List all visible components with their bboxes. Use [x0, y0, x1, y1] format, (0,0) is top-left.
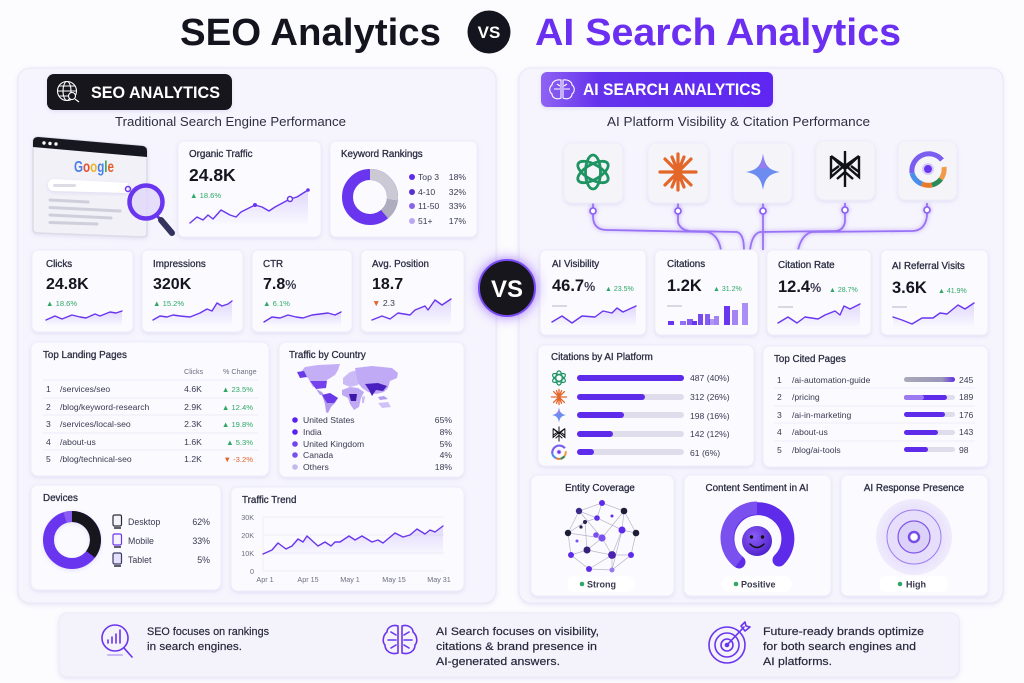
card: traffic by country [279, 342, 464, 477]
table: top cited pages: 98 [959, 445, 969, 455]
card: impressions: ▲ 15.2% [153, 299, 184, 308]
text: SEO focus [147, 626, 269, 653]
table: top cited pages: 4 [777, 427, 782, 437]
card: devices [31, 485, 221, 590]
table: top cited pages: /blog/ai-tools [792, 445, 841, 455]
line chart: traffic trend: May 1 [340, 575, 360, 584]
line chart: traffic trend [241, 513, 451, 584]
table: top landing pages: 1 [46, 384, 51, 394]
legend: devices: Tablet [128, 555, 152, 565]
donut: keyword rankings [348, 174, 393, 220]
card: content sentiment: Content Sentiment in AI [706, 483, 808, 494]
card: impressions: 320K [153, 276, 192, 293]
table: top landing pages: Clicks [184, 367, 204, 376]
status pill: high [879, 576, 948, 592]
badge: SEO analytics: SEO ANALYTICS [91, 83, 220, 102]
table: top landing pages: /about-us [60, 437, 96, 447]
table: top landing pages: 2.3K [184, 419, 202, 429]
legend: traffic by country: United Kingdom [303, 439, 364, 449]
status pill: strong [567, 576, 635, 592]
title: SEO Analytics [180, 12, 441, 54]
bar list: citations by platform [551, 371, 730, 459]
table: top cited pages: 143 [959, 427, 974, 437]
badge: SEO analytics [47, 74, 232, 110]
table: top landing pages: /services/seo [60, 384, 110, 394]
world map [297, 364, 398, 413]
line chart: traffic trend: Apr 15 [297, 575, 319, 584]
line chart: traffic trend: 20K [241, 531, 254, 540]
legend: traffic by country: Canada [303, 450, 333, 460]
connector lines [590, 203, 930, 250]
table: top landing pages: 4.6K [184, 384, 202, 394]
card: organic traffic [178, 141, 321, 237]
text: SEO focus: SEO focuses on rankings [147, 626, 269, 638]
bar list: citations by platform: 142 (12%) [690, 429, 730, 439]
legend: devices: Mobile [128, 536, 154, 546]
card: citations by AI platform: Citations by AI Platform [551, 352, 653, 363]
donut: devices [48, 516, 96, 564]
card: clicks: 24.8K [46, 276, 89, 293]
legend: keyword rankings: 18% [449, 172, 466, 182]
icon: brain [383, 625, 417, 654]
card: AI referral visits: ▲ 41.9% [938, 288, 967, 295]
text: AI search focus [436, 626, 599, 668]
line chart: traffic trend: 0 [250, 567, 254, 576]
card: AI visibility: ▲ 23.5% [605, 286, 634, 293]
card: average position: Avg. Position [372, 259, 429, 270]
icon tile: Claude [648, 143, 708, 203]
table: top cited pages: 176 [959, 410, 974, 420]
status pill: high: High [906, 580, 926, 590]
VS badge: VS [491, 276, 523, 303]
card: citation rate: Citation Rate [778, 260, 835, 271]
table: top landing pages: % Change [223, 367, 257, 376]
title [180, 10, 901, 54]
card: citations [655, 250, 758, 335]
VS badge [479, 260, 535, 316]
card: top landing pages [31, 342, 269, 476]
text: future-ready brands: AI platforms. [763, 656, 832, 668]
table: top cited pages: 3 [777, 410, 782, 420]
table: top cited pages: 5 [777, 445, 782, 455]
card: citations by AI platform [538, 345, 754, 466]
line chart: traffic trend: 30K [241, 513, 254, 522]
legend: devices: Desktop [128, 517, 160, 527]
table: top landing pages: /blog/keyword-research [60, 402, 150, 412]
text: AI search focus: AI Search focuses on visibility, [436, 626, 599, 638]
bar list: citations by platform: 61 (6%) [690, 448, 720, 458]
card: entity coverage: Entity Coverage [565, 483, 635, 494]
table: top landing pages: 5 [46, 454, 51, 464]
status pill: strong: Strong [587, 580, 616, 590]
table: top cited pages: 1 [777, 375, 782, 385]
panel: AI search analytics [519, 68, 1003, 603]
bar chart: citations [668, 303, 748, 325]
legend: devices: 33% [192, 536, 210, 546]
card: AI visibility: AI Visibility [552, 259, 599, 270]
card: average position [361, 250, 464, 332]
table: top landing pages: ▲ 23.5% [222, 385, 253, 394]
text: AI search focus: citations & brand presence in [436, 641, 597, 653]
subtitle: Traditional Search Engine Performance [115, 114, 346, 129]
legend: keyword rankings: 4-10 [418, 187, 435, 197]
card: average position: 18.7 [372, 276, 403, 293]
legend: traffic by country: 65% [435, 415, 452, 425]
card: AI referral visits: AI Referral Visits [892, 261, 965, 272]
card: average position: ▼ 2.3 [372, 298, 395, 308]
legend: keyword rankings: 33% [449, 201, 466, 211]
badge: AI search analytics: AI SEARCH ANALYTICS [583, 81, 761, 99]
card: citation rate: 12.4% [778, 278, 821, 296]
status pill: positive: Positive [741, 580, 776, 590]
legend: devices: 5% [197, 555, 210, 565]
card: AI visibility: 46.7% [552, 277, 595, 295]
legend: traffic by country: India [303, 427, 322, 437]
table: top landing pages: ▼ -3.2% [224, 455, 253, 464]
illustration: browser with magnifier: Google [74, 159, 114, 176]
legend: keyword rankings: 32% [449, 187, 466, 197]
subtitle: AI Platform Visibility & Citation Performance [607, 114, 870, 129]
table: top landing pages: 1.2K [184, 454, 202, 464]
card: top landing pages: Top Landing Pages [43, 350, 127, 361]
table: top landing pages: /services/local-seo [60, 419, 131, 429]
card: CTR: CTR [263, 259, 283, 270]
icon: target [709, 622, 750, 663]
table: top cited pages: /ai-automation-guide [792, 375, 871, 385]
card: impressions [142, 250, 243, 332]
card: AI response presence: AI Response Presence [864, 483, 965, 494]
panel: SEO analytics [18, 68, 496, 603]
text: future-ready brands: Future-ready brands optimize [763, 626, 924, 638]
title: AI Search Analytics [535, 12, 901, 54]
table: top cited pages: 245 [959, 375, 974, 385]
card: organic traffic: 24.8K [189, 165, 236, 185]
bar list: citations by platform: 198 (16%) [690, 411, 730, 421]
table: top landing pages: 2 [46, 402, 51, 412]
line chart: traffic trend: 10K [241, 549, 254, 558]
legend: keyword rankings: 17% [449, 216, 466, 226]
text: future-ready brands: for both search engines and [763, 641, 916, 653]
legend: traffic by country [292, 415, 452, 472]
card: traffic trend: Traffic Trend [242, 495, 296, 506]
card: AI visibility [540, 250, 646, 335]
card: clicks: Clicks [46, 259, 72, 270]
legend: keyword rankings: Top 3 [418, 172, 439, 182]
card: top cited pages: Top Cited Pages [774, 354, 846, 365]
card: keyword rankings [330, 141, 477, 237]
card: organic traffic: Organic Traffic [189, 149, 253, 160]
illustration: browser with magnifier [33, 137, 172, 237]
card: traffic trend [231, 487, 464, 591]
table: top cited pages: /about-us [792, 427, 828, 437]
card: keyword rankings: Keyword Rankings [341, 149, 423, 160]
legend: traffic by country: 8% [440, 427, 452, 437]
legend: traffic by country: Others [303, 462, 329, 472]
icon tile: ChatGPT [564, 143, 623, 203]
table: top cited pages: /ai-in-marketing [792, 410, 851, 420]
line chart: traffic trend: May 15 [382, 575, 406, 584]
card: citations: Citations [667, 259, 705, 270]
legend: keyword rankings: 51+ [418, 216, 433, 226]
table: top cited pages: /pricing [792, 392, 820, 402]
table: top landing pages: 2.9K [184, 402, 202, 412]
legend: keyword rankings [409, 172, 466, 226]
card: impressions: Impressions [153, 259, 206, 270]
line chart: traffic trend: May 31 [427, 575, 451, 584]
table: top landing pages: /blog/technical-seo [60, 454, 132, 464]
card: traffic by country: Traffic by Country [289, 350, 366, 361]
table: top landing pages: 3 [46, 419, 51, 429]
card: CTR: 7.8% [263, 276, 296, 293]
bar list: citations by platform: 312 (26%) [690, 392, 730, 402]
legend: devices [113, 515, 210, 566]
table: top cited pages [774, 375, 975, 455]
icon: analytics magnifier [102, 625, 132, 657]
sparkline: organic traffic [190, 188, 310, 226]
legend: traffic by country: 5% [440, 439, 452, 449]
legend: traffic by country: 4% [440, 450, 452, 460]
legend: devices: 62% [192, 517, 210, 527]
icon tile: Gemini [733, 143, 792, 203]
table: top landing pages: 4 [46, 437, 51, 447]
text: SEO focus: in search engines. [147, 641, 242, 653]
card: organic traffic: ▲ 18.6% [190, 191, 221, 200]
legend: traffic by country: 18% [435, 462, 452, 472]
table: top landing pages: ▲ 12.4% [222, 403, 253, 412]
title: VS [478, 23, 500, 42]
card: CTR [252, 250, 352, 332]
card: citation rate: ▲ 28.7% [829, 287, 858, 294]
card: CTR: ▲ 6.1% [263, 299, 290, 308]
legend: keyword rankings: 11-50 [418, 201, 440, 211]
radar target [876, 499, 952, 575]
table: top cited pages: 189 [959, 392, 974, 402]
card: devices: Devices [43, 493, 78, 504]
card: citations: ▲ 31.2% [713, 286, 742, 293]
footer strip [59, 613, 959, 677]
card: clicks: ▲ 18.6% [46, 299, 77, 308]
table: top cited pages: 2 [777, 392, 782, 402]
card: content sentiment [684, 475, 831, 596]
status pill: positive [722, 576, 792, 592]
icon tile: Perplexity [816, 141, 875, 200]
card: AI referral visits: 3.6K [892, 279, 927, 297]
card: top cited pages [763, 346, 988, 467]
table: top landing pages: ▲ 19.8% [222, 420, 253, 429]
card: clicks [32, 250, 133, 332]
icon tile: Copilot [898, 141, 957, 200]
badge: AI search analytics [541, 72, 773, 107]
bar list: citations by platform: 487 (40%) [690, 373, 730, 383]
text: future-ready brands [763, 626, 924, 668]
network graph [565, 500, 639, 572]
legend: traffic by country: United States [303, 415, 355, 425]
line chart: traffic trend: Apr 1 [256, 575, 274, 584]
text: AI search focus: AI-generated answers. [436, 656, 560, 668]
card: citations: 1.2K [667, 277, 702, 295]
table: top landing pages: 1.6K [184, 437, 202, 447]
card: AI referral visits [881, 250, 988, 335]
table: top landing pages [43, 367, 258, 464]
card: AI response presence [841, 475, 988, 596]
table: top landing pages: ▲ 5.3% [226, 438, 253, 447]
card: citation rate [767, 250, 871, 335]
card: entity coverage [531, 475, 674, 596]
gauge: sentiment [727, 508, 788, 562]
